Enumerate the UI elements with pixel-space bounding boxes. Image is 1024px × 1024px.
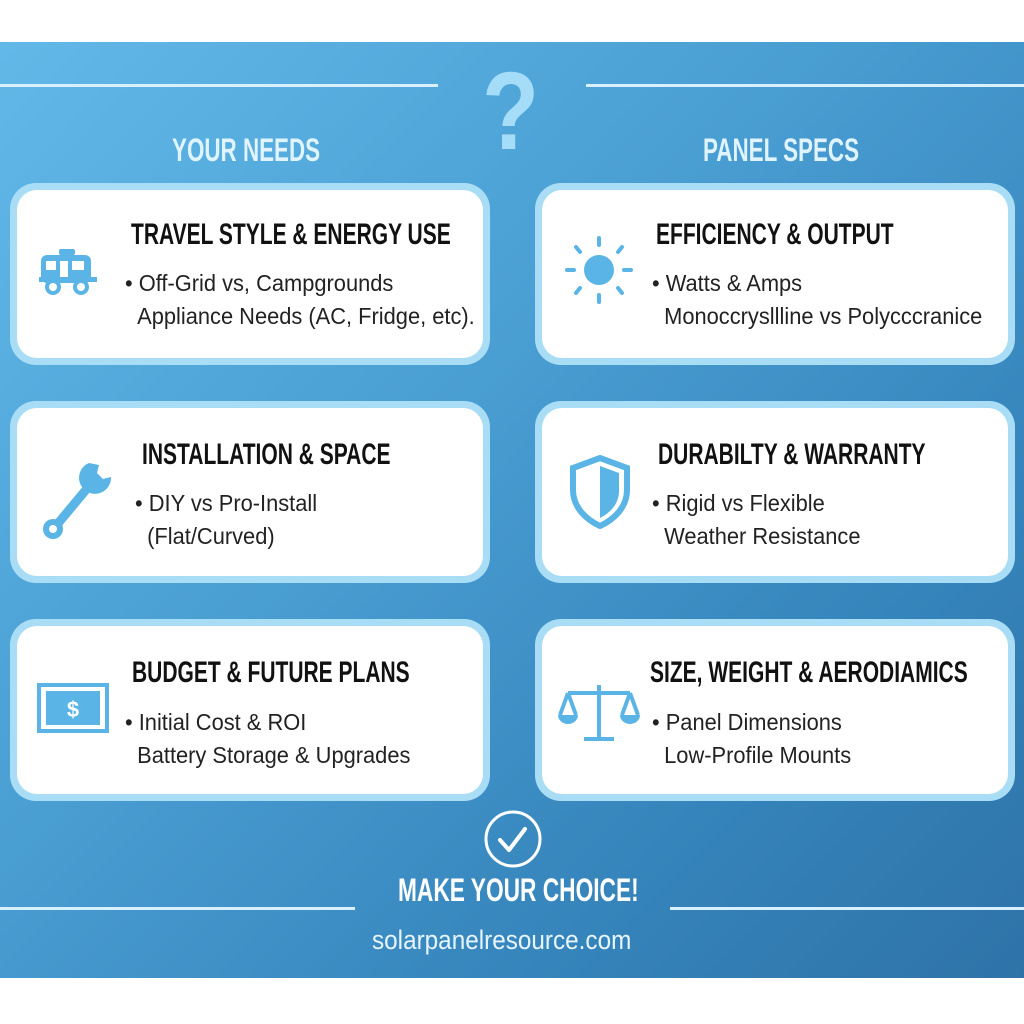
bullets: (Flat/Curved)	[147, 523, 275, 549]
title: INSTALLATION & SPACE	[142, 438, 390, 471]
icon: rv	[39, 249, 97, 295]
bullets: Low-Profile Mounts	[664, 742, 851, 768]
icon: wrench	[43, 463, 111, 539]
bullets: Appliance Needs (AC, Fridge, etc).	[137, 303, 475, 329]
title: EFFICIENCY & OUTPUT	[656, 218, 894, 251]
heading: make your choice: MAKE YOUR CHOICE!	[398, 872, 639, 908]
bullets	[652, 709, 851, 768]
footer url: solarpanelresource.com	[372, 925, 631, 955]
panel: durability	[535, 401, 1015, 583]
bullets: • Initial Cost & ROI	[125, 709, 306, 735]
bullets: • Panel Dimensions	[652, 709, 842, 735]
icon: question mark: ?	[482, 50, 539, 173]
bullets: • Off-Grid vs, Campgrounds	[125, 270, 393, 296]
bullets: • Rigid vs Flexible	[652, 490, 825, 516]
bullets	[125, 270, 475, 329]
bullets: Battery Storage & Upgrades	[137, 742, 410, 768]
bullets	[135, 490, 317, 549]
bullets: Monoccrysllline vs Polycccranice	[664, 303, 982, 329]
bullets	[652, 270, 982, 329]
panel: installation	[10, 401, 490, 583]
bullets: Weather Resistance	[664, 523, 860, 549]
panel: size weight	[535, 619, 1015, 801]
icon: shield	[570, 454, 630, 530]
title: BUDGET & FUTURE PLANS	[132, 656, 410, 689]
bullets	[652, 490, 860, 549]
icon: dollar bill: $	[67, 697, 79, 722]
icon: scale	[558, 685, 640, 741]
panel: budget	[10, 619, 490, 801]
bullets: • DIY vs Pro-Install	[135, 490, 317, 516]
panel: travel style	[10, 183, 490, 365]
icon: check circle	[484, 810, 542, 868]
title: SIZE, WEIGHT & AERODIAMICS	[650, 656, 968, 689]
panel: efficiency	[535, 183, 1015, 365]
icon: sun	[565, 236, 633, 304]
title: TRAVEL STYLE & ENERGY USE	[131, 218, 451, 251]
heading: panel specs: PANEL SPECS	[703, 132, 859, 168]
title: DURABILTY & WARRANTY	[658, 438, 926, 471]
icon: dollar bill	[37, 683, 109, 733]
bullets	[125, 709, 410, 768]
bullets: • Watts & Amps	[652, 270, 802, 296]
heading: your needs: YOUR NEEDS	[172, 132, 320, 168]
